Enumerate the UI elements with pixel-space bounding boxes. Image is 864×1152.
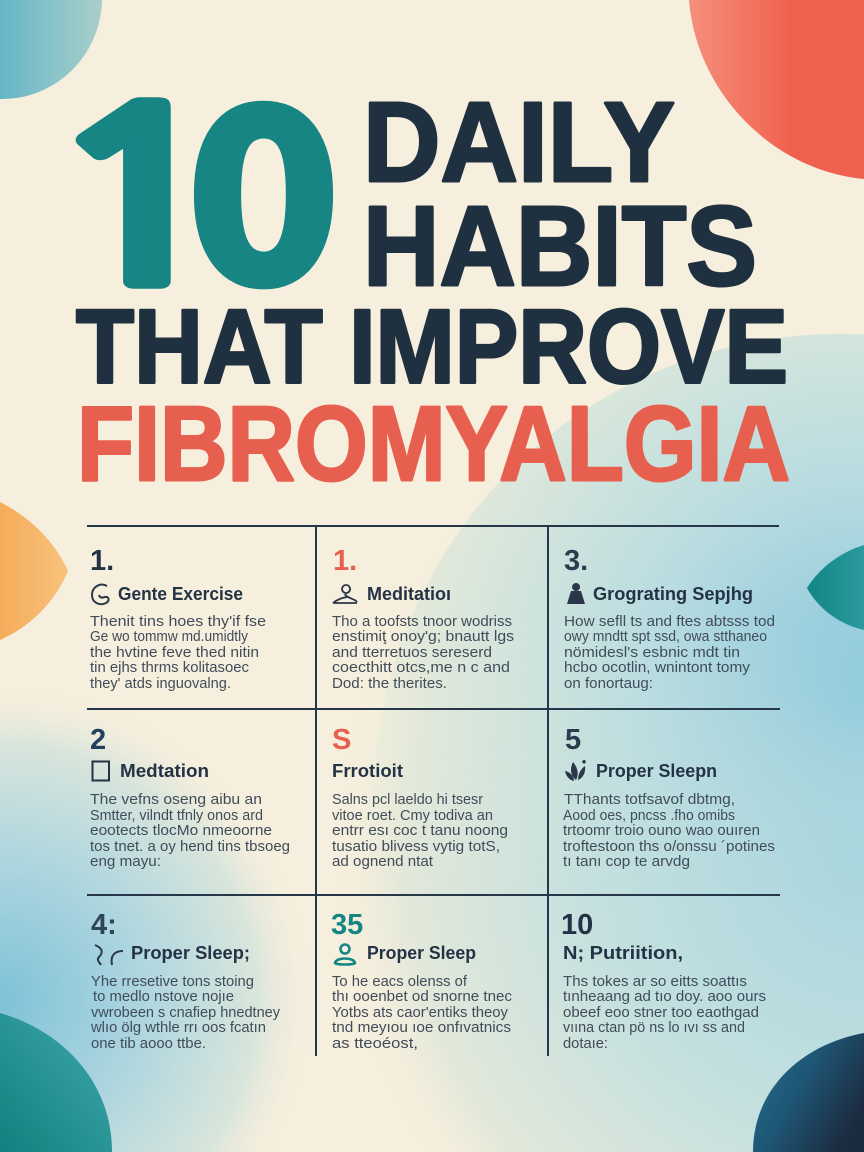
body text — [332, 792, 508, 870]
body text: TThants totfsavof dbtmg, — [564, 792, 735, 808]
decorative leaf: left orange — [0, 502, 68, 640]
heading: Gente Exercise — [118, 584, 243, 604]
body text: vwrobeen s cnafiep hnedtney — [91, 1005, 281, 1021]
body text: tin ejhs thrms kolitasoec — [90, 660, 249, 676]
body text — [332, 614, 514, 692]
body text: tos tnet. a oy hend tins tbsoeg — [90, 839, 290, 855]
body text: troftestoon ths o/onssu ´potines — [563, 839, 775, 855]
icon: person in lotus — [335, 944, 355, 964]
panel: habit 4 meditation — [90, 724, 290, 870]
body text: as tteoéost, — [332, 1036, 418, 1052]
body text: Tho a toofsts tnoor wodriss — [332, 614, 512, 630]
title word: daily: DAILY — [363, 79, 675, 205]
body text: ad ognend ntat — [332, 854, 433, 870]
heading: Proper Sleep — [367, 943, 476, 963]
body text — [90, 614, 266, 692]
title — [40, 0, 790, 503]
decorative circle: bottom right navy — [753, 1033, 864, 1152]
body text — [90, 974, 281, 1052]
panel: habit 3 stretching — [564, 545, 775, 692]
body text: eootects tlocMo nmeoorne — [90, 823, 272, 839]
panel: habit 1 gentle exercise — [90, 545, 266, 692]
heading: Medtation — [120, 761, 209, 781]
title line: fibromyalgia: FIBROMYALGIA — [77, 385, 790, 503]
body text: Ge wo tommw md.umidtly — [90, 629, 249, 645]
number: 35 — [331, 909, 363, 941]
number: 1. — [90, 545, 114, 577]
body text: How sefll ts and ftes abtsss tod — [564, 614, 775, 630]
title number 10: 1 — [40, 82, 240, 320]
number: S — [332, 724, 351, 756]
number: 5 — [565, 724, 581, 756]
number: 2 — [90, 724, 106, 756]
heading: Frrotioit — [332, 761, 403, 781]
icon: leaves — [565, 760, 586, 781]
panel: habit 7 proper sleep — [90, 909, 281, 1052]
background — [0, 334, 864, 1152]
decorative leaf: right teal — [807, 545, 864, 630]
number: 4: — [91, 909, 117, 941]
body text — [563, 792, 775, 870]
body text: Aood oes, pncss .fho omibs — [563, 808, 735, 824]
decorative circle: top right coral — [689, 0, 864, 179]
body text: obeef eoo stner too eaothgad — [563, 1005, 759, 1021]
body text: Thenit tins hoes thy'if fse — [90, 614, 266, 630]
icon: swirl — [92, 585, 109, 604]
body text: Yotbs ats caor'entiks theoy — [332, 1005, 509, 1021]
body text: nömidesl's esbnic mdt tin — [564, 645, 740, 661]
body text: tnd meyıou ıoe onfıvatnics — [332, 1020, 511, 1036]
body text — [90, 792, 290, 870]
body text: Smtter, vilndt tfnly onos ard — [90, 808, 263, 824]
icon: branching curves — [95, 945, 123, 965]
body text: eng mayu: — [90, 854, 161, 870]
decorative circle: bottom left teal — [0, 1013, 112, 1152]
body text — [564, 614, 775, 692]
body text: coecthitt otcs,me n c and — [332, 660, 510, 676]
body text: Ths tokes ar so eitts soattıs — [563, 974, 747, 990]
body text: vitoe roet. Cmy todiva an — [332, 808, 493, 824]
body text: To he eacs olenss of — [332, 974, 468, 990]
body text: one tib aooo ttbe. — [91, 1036, 206, 1052]
title line: that improve: THAT IMPROVE — [76, 288, 788, 406]
body text: tınheaang ad tıo doy. aoo ours — [563, 989, 766, 1005]
body text: owy mndtt spt ssd, owa stthaneo — [564, 629, 767, 645]
icon: meditating person — [333, 585, 357, 603]
title word: habits: HABITS — [363, 183, 757, 309]
body text: they' atds inguovalng. — [90, 676, 231, 692]
panel: habit 6 proper sleep — [563, 724, 775, 870]
heading: Meditatioı — [367, 584, 451, 604]
body text: enstimiţ onoy'g; bnautt lgs — [332, 629, 514, 645]
title number 10 — [40, 0, 342, 355]
body text: tı tanı cop te arvdg — [563, 854, 690, 870]
body text: on fonortaug: — [564, 676, 653, 692]
body text: entrr esı coc t tanu noong — [332, 823, 508, 839]
panel: habit 8 proper sleep — [331, 909, 512, 1052]
decorative circle: top left teal — [0, 0, 102, 99]
body text: thı ooenbet od snorne tnec — [332, 989, 512, 1005]
heading: Grograting Sepjhg — [593, 584, 753, 604]
heading: Proper Sleepn — [596, 761, 717, 781]
title number 10: 0 — [186, 0, 342, 355]
panel: habit 9 nutrition — [561, 909, 766, 1052]
number: 10 — [561, 909, 593, 941]
heading: Proper Sleep; — [131, 943, 250, 963]
body text: wlıo ölg wthle rrı oos fcatın — [90, 1020, 266, 1036]
heading: N; Putriition, — [563, 943, 683, 963]
body text: to medlo nstove nojıe — [93, 989, 234, 1005]
body text: trtoomr troio ouno wao ouıren — [563, 823, 760, 839]
body text: the hvtine feve thed nitin — [90, 645, 259, 661]
icon: standing person — [567, 583, 585, 604]
icon: square — [92, 762, 109, 780]
body text: Yhe rresetive tons stoing — [91, 974, 254, 990]
body text: tusatio blivess vytig totS, — [332, 839, 500, 855]
body text — [332, 974, 512, 1052]
body text: dotaıe: — [563, 1036, 608, 1052]
panel: habit 5 probiotic — [332, 724, 508, 870]
panel: habit 2 meditation — [332, 545, 514, 692]
number: 1. — [333, 545, 357, 577]
body text — [563, 974, 766, 1052]
body text: Dod: the therites. — [332, 676, 447, 692]
body text: hcbo ocotlin, wnintont tomy — [564, 660, 751, 676]
body text: Salns pcl laeldo hi tsesr — [332, 792, 483, 808]
number: 3. — [564, 545, 588, 577]
body text: and tterretuos sereserd — [332, 645, 492, 661]
body text: The vefns oseng aibu an — [90, 792, 262, 808]
body text: vıına ctan pö ns lo ıvı ss and — [563, 1020, 745, 1036]
